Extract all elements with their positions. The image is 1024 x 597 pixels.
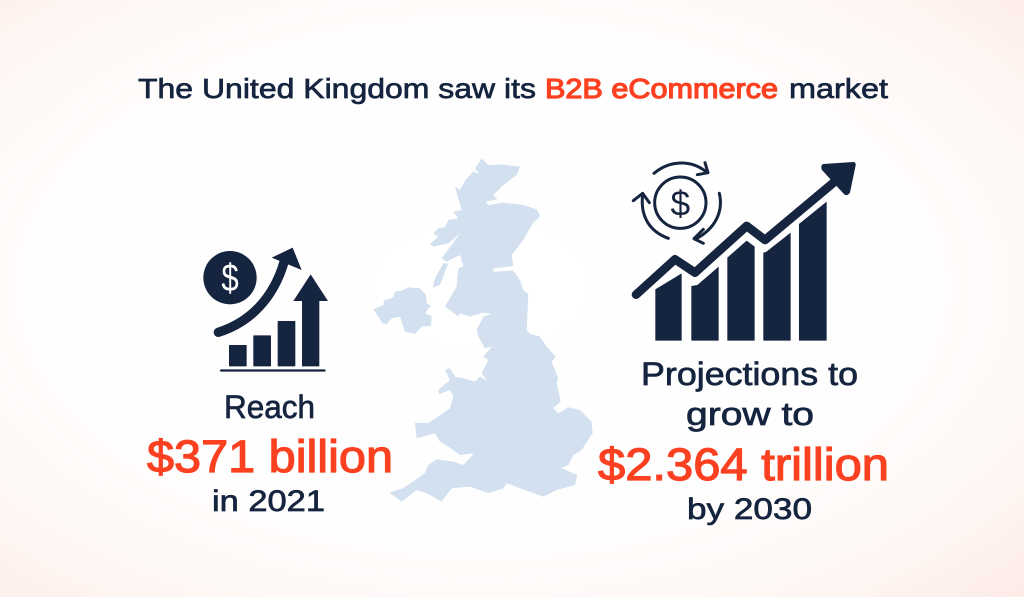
text: Projections to: Projections to [641, 356, 858, 392]
text: by 2030: by 2030 [687, 493, 812, 526]
map: United Kingdom [373, 158, 593, 502]
text: Reach: Reach [224, 389, 315, 425]
title: B2B eCommerce [545, 73, 778, 104]
dollar sign: $ [671, 184, 691, 223]
value: $371 billion: $371 billion [147, 431, 393, 482]
title [138, 73, 888, 104]
value: $2.364 trillion: $2.364 trillion [598, 439, 889, 490]
text: in 2021: in 2021 [212, 485, 325, 518]
map: Northern Ireland [373, 287, 432, 334]
text: grow to: grow to [686, 396, 814, 432]
title: The United Kingdom saw its [138, 73, 536, 104]
icon: large growth chart with rotating dollar [633, 162, 856, 341]
title: market [789, 73, 888, 104]
dollar sign: $ [221, 256, 239, 300]
icon: small growth chart with dollar coin [203, 248, 328, 372]
